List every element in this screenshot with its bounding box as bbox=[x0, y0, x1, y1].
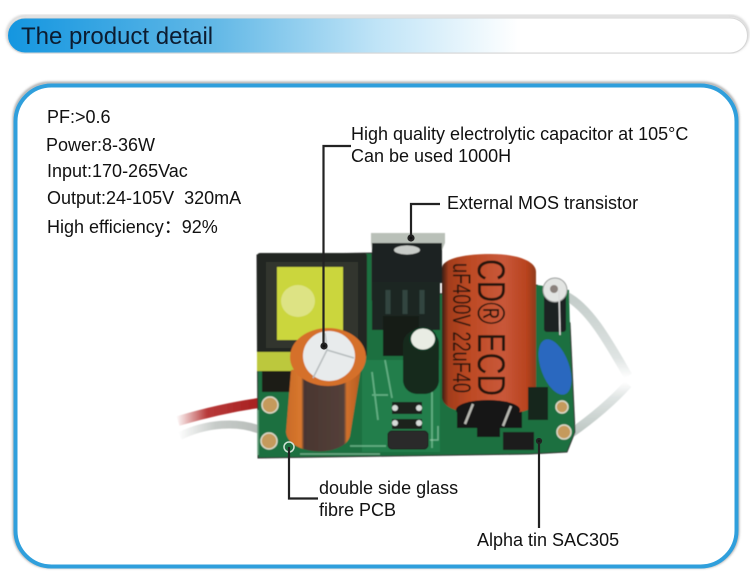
label: MOS transistor: External MOS transistor bbox=[447, 193, 638, 213]
orange electrolytic capacitor bbox=[286, 328, 366, 451]
large ECD capacitor: uF400V 22uF40 bbox=[447, 263, 475, 393]
label: PCB: double side glass bbox=[319, 478, 458, 498]
label: PCB: fibre PCB bbox=[319, 500, 396, 520]
MOS transistor bbox=[371, 233, 445, 356]
leader line: capacitor bbox=[322, 146, 351, 348]
label: solder: Alpha tin SAC305 bbox=[477, 530, 619, 550]
label: capacitor: Can be used 1000H bbox=[351, 146, 511, 166]
specifications text block: High efficiency：92% bbox=[47, 217, 218, 237]
label: capacitor bbox=[351, 124, 688, 166]
leader line: solder bbox=[537, 439, 541, 528]
title bar bbox=[7, 16, 748, 53]
specifications text block: Input:170-265Vac bbox=[47, 161, 188, 181]
small green capacitor bbox=[403, 327, 439, 394]
specifications text block: PF:>0.6 bbox=[47, 107, 111, 127]
transformer bbox=[257, 253, 367, 392]
specifications text block: Power:8-36W bbox=[46, 135, 155, 155]
input and output wires bbox=[178, 296, 628, 436]
label: capacitor: High quality electrolytic capacitor at 105°C bbox=[351, 124, 688, 144]
solder pads bbox=[261, 397, 571, 449]
black SMD and right-side parts bbox=[503, 278, 567, 450]
green PCB bbox=[257, 253, 575, 458]
blue varistor bbox=[532, 335, 578, 399]
small SMD parts bbox=[388, 402, 428, 449]
large ECD capacitor bbox=[442, 254, 536, 437]
leader line: PCB bbox=[284, 442, 318, 498]
specifications text block bbox=[46, 107, 241, 237]
label: PCB bbox=[319, 478, 458, 520]
title text: The product detail bbox=[21, 23, 213, 50]
circuit board photo bbox=[178, 233, 628, 458]
specifications text block: Output:24-105V 320mA bbox=[47, 188, 241, 208]
large ECD capacitor: CD® ECD bbox=[469, 259, 512, 396]
leader line: MOS transistor bbox=[408, 204, 440, 240]
